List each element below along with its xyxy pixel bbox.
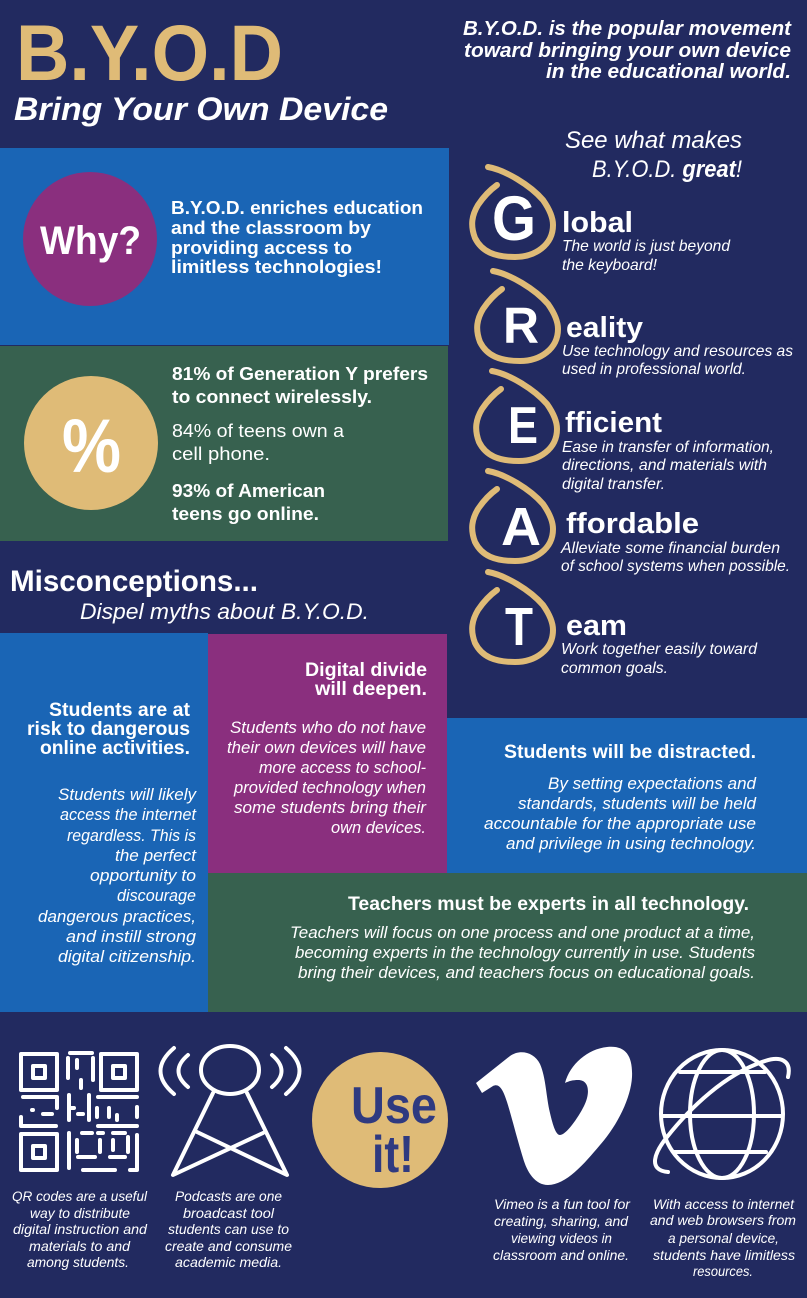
use it circle: Use xyxy=(351,1077,437,1135)
GREAT: reality xyxy=(477,271,793,378)
GREAT: reality: Use technology and resources as xyxy=(562,343,793,360)
panel: online risk myth: the perfect xyxy=(115,847,197,865)
title: Bring Your Own Device xyxy=(14,91,388,127)
GREAT: global: the keyboard! xyxy=(562,257,658,274)
GREAT: efficient: Ease in transfer of information, xyxy=(562,439,774,456)
panel: online risk myth: digital citizenship. xyxy=(58,948,196,966)
panel: digital divide myth: their own devices will have xyxy=(227,739,426,757)
panel: online risk myth: discourage xyxy=(117,887,196,905)
caption: web browsers: and web browsers from xyxy=(650,1212,796,1228)
panel: distraction myth: accountable for the appropriate use xyxy=(484,815,756,833)
panel: digital divide myth: provided technology when xyxy=(233,779,426,797)
caption: QR codes: way to distribute xyxy=(30,1205,130,1221)
GREAT heading xyxy=(565,127,742,183)
GREAT: reality: eality xyxy=(566,312,643,344)
panel: online risk myth: risk to dangerous xyxy=(27,719,190,740)
GREAT: team: common goals. xyxy=(561,660,668,677)
GREAT: global xyxy=(472,167,731,274)
intro text xyxy=(463,18,792,83)
icon: vimeo xyxy=(476,1047,632,1185)
heading: misconceptions: Dispel myths about B.Y.O.D. xyxy=(80,599,369,624)
GREAT: reality: R xyxy=(503,297,539,354)
panel: online risk myth: Students will likely xyxy=(58,786,198,804)
statistics text: 81% of Generation Y prefers xyxy=(172,364,428,384)
GREAT: efficient: E xyxy=(508,397,538,455)
use it circle: it! xyxy=(372,1126,414,1184)
heading: misconceptions: Misconceptions... xyxy=(10,565,258,598)
caption: podcasts: Podcasts are one xyxy=(175,1188,282,1204)
caption: web browsers: resources. xyxy=(693,1263,753,1279)
GREAT: team: T xyxy=(505,597,533,657)
panel: online risk myth: and instill strong xyxy=(66,928,197,946)
caption: podcasts xyxy=(165,1188,292,1270)
GREAT: efficient xyxy=(476,371,774,493)
panel: digital divide myth: Digital divide xyxy=(305,660,427,681)
GREAT: affordable: A xyxy=(501,497,541,557)
GREAT: global: lobal xyxy=(562,207,633,239)
caption: vimeo: Vimeo is a fun tool for xyxy=(494,1196,631,1212)
panel: distraction myth: and privilege in using technology. xyxy=(506,835,756,853)
caption: QR codes xyxy=(12,1188,148,1270)
caption: vimeo: creating, sharing, and xyxy=(494,1213,629,1229)
caption: podcasts: broadcast tool xyxy=(183,1205,275,1221)
panel: online risk myth: Students are at xyxy=(49,700,191,721)
panel: teacher expert myth: Teachers will focus on one process and one product at a time, xyxy=(290,924,755,942)
caption: vimeo: classroom and online. xyxy=(493,1247,629,1263)
panel: digital divide myth: own devices. xyxy=(331,819,426,837)
caption: QR codes: digital instruction and xyxy=(13,1221,148,1237)
panel: online risk myth: opportunity to xyxy=(90,867,196,885)
statistics text xyxy=(172,364,428,524)
why circle xyxy=(23,172,157,306)
icon: globe xyxy=(655,1050,789,1178)
panel: digital divide myth: some students bring their xyxy=(234,799,428,817)
caption: vimeo: viewing videos in xyxy=(511,1230,612,1246)
GREAT: reality: used in professional world. xyxy=(562,361,746,378)
panel: why xyxy=(0,148,449,345)
GREAT: global: The world is just beyond xyxy=(562,238,731,255)
use it circle xyxy=(312,1052,448,1188)
icon: podcast tower xyxy=(160,1046,300,1175)
panel: distraction myth: Students will be distracted. xyxy=(504,742,756,763)
panel: digital divide myth: will deepen. xyxy=(314,679,427,700)
panel: distraction myth: standards, students will be held xyxy=(518,795,757,813)
caption: web browsers xyxy=(650,1196,796,1279)
panel: online risk myth: online activities. xyxy=(40,738,190,759)
title: B.Y.O.D xyxy=(16,8,283,97)
statistics text: teens go online. xyxy=(172,504,319,524)
GREAT: global: G xyxy=(492,184,536,254)
GREAT: affordable: of school systems when possible. xyxy=(561,558,790,575)
panel: teacher expert myth: becoming experts in the technology currently in use. Students xyxy=(295,944,755,962)
percent circle: % xyxy=(62,404,121,489)
intro text: toward bringing your own device xyxy=(464,40,791,62)
panel: teacher expert myth xyxy=(208,873,807,1012)
panel: teacher expert myth: bring their devices, and teachers focus on educational goals. xyxy=(298,964,755,982)
GREAT: team xyxy=(472,572,758,677)
panel: online risk myth: dangerous practices, xyxy=(38,908,196,926)
GREAT heading: B.Y.O.D. great! xyxy=(592,156,742,183)
GREAT: efficient: digital transfer. xyxy=(562,476,665,493)
statistics text: cell phone. xyxy=(172,444,270,464)
caption: web browsers: a personal device, xyxy=(668,1230,779,1246)
panel: online risk myth: regardless. This is xyxy=(67,827,196,845)
panel: distraction myth xyxy=(447,718,807,873)
GREAT heading: See what makes xyxy=(565,127,742,154)
statistics text: 84% of teens own a xyxy=(172,421,345,441)
panel: distraction myth: By setting expectations and xyxy=(548,775,757,793)
caption: podcasts: create and consume xyxy=(165,1238,292,1254)
GREAT: team: Work together easily toward xyxy=(561,641,758,658)
panel: online risk myth xyxy=(0,633,208,1012)
GREAT: affordable: ffordable xyxy=(566,508,699,540)
why text: and the classroom by xyxy=(171,218,371,238)
caption: web browsers: students have limitless xyxy=(653,1247,795,1263)
GREAT: affordable: Alleviate some financial burden xyxy=(560,540,780,557)
caption: podcasts: academic media. xyxy=(175,1254,282,1270)
GREAT: efficient: directions, and materials with xyxy=(562,457,767,474)
panel: online risk myth: access the internet xyxy=(60,806,197,824)
title xyxy=(14,8,388,127)
icon: QR code xyxy=(21,1053,137,1170)
GREAT: efficient: fficient xyxy=(565,407,662,439)
panel: digital divide myth xyxy=(208,634,447,873)
panel: digital divide myth: Students who do not have xyxy=(230,719,426,737)
GREAT: team: eam xyxy=(566,610,627,642)
caption: web browsers: With access to internet xyxy=(653,1196,795,1212)
statistics text: 93% of American xyxy=(172,481,325,501)
intro text: B.Y.O.D. is the popular movement xyxy=(463,18,792,40)
statistics text: to connect wirelessly. xyxy=(172,387,372,407)
heading: misconceptions xyxy=(10,565,369,624)
panel: statistics xyxy=(0,346,448,541)
caption: QR codes: materials to and xyxy=(29,1238,131,1254)
why text: B.Y.O.D. enriches education xyxy=(171,198,423,218)
caption: QR codes: QR codes are a useful xyxy=(12,1188,148,1204)
caption: podcasts: students can use to xyxy=(168,1221,289,1237)
why text xyxy=(171,198,423,277)
why text: limitless technologies! xyxy=(171,257,382,277)
panel: digital divide myth: more access to school- xyxy=(259,759,426,777)
panel: teacher expert myth: Teachers must be experts in all technology. xyxy=(348,894,749,915)
why circle: Why? xyxy=(40,219,141,263)
caption: QR codes: among students. xyxy=(27,1254,129,1270)
intro text: in the educational world. xyxy=(546,61,791,83)
caption: vimeo xyxy=(493,1196,631,1263)
GREAT: affordable xyxy=(472,471,790,575)
percent circle xyxy=(24,376,158,510)
why text: providing access to xyxy=(171,238,352,258)
